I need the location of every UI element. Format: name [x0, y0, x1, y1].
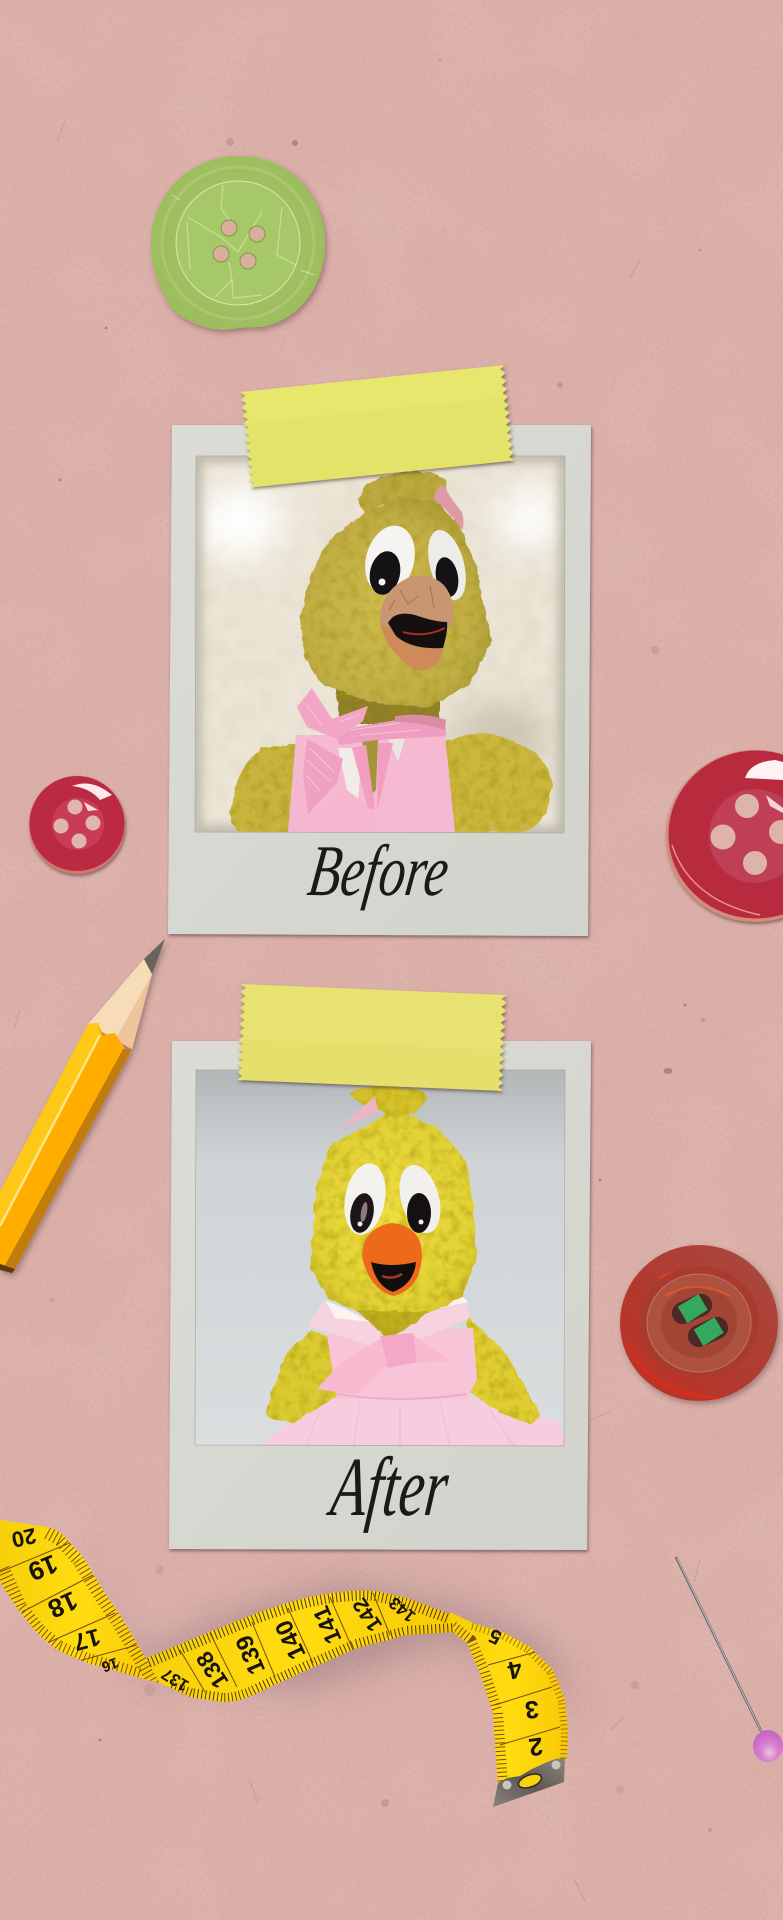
- chick eye right: [393, 1160, 447, 1238]
- tape numbers: 142: [348, 1594, 387, 1635]
- washi tape: top: [240, 365, 514, 488]
- tape numbers: 18: [44, 1585, 82, 1624]
- tape numbers: 137: [158, 1664, 192, 1695]
- chick hair bow: [338, 1096, 378, 1130]
- tape shadow: [75, 1550, 580, 1730]
- tape numbers: [486, 1624, 545, 1761]
- tape numbers: 19: [24, 1549, 62, 1587]
- button thread: [668, 1290, 716, 1328]
- chick tuft: [350, 1086, 427, 1118]
- tape tail section: [450, 1612, 568, 1807]
- chick skirt: [256, 1397, 566, 1448]
- pencil body: [0, 1023, 132, 1269]
- chick head: [310, 1114, 477, 1316]
- washi tape: top: [237, 984, 507, 1091]
- panel: after polaroid: [169, 984, 591, 1550]
- tape middle section: [140, 1590, 455, 1702]
- tape numbers: 3: [524, 1695, 540, 1724]
- chick neck: [355, 1310, 430, 1336]
- chick hair bow: [433, 485, 464, 530]
- tape numbers: 138: [191, 1647, 233, 1693]
- photo: after: [190, 1065, 570, 1450]
- icon: green button: [151, 156, 325, 330]
- tape numbers: 4: [505, 1654, 525, 1684]
- chick collar: [308, 1300, 470, 1350]
- tape numbers: [158, 1593, 419, 1695]
- chick neck ribbon: [333, 719, 446, 745]
- pencil wood: [88, 959, 152, 1049]
- chick arm right: [465, 1316, 541, 1425]
- panel: before polaroid: [168, 365, 591, 936]
- tape numbers: 140: [270, 1616, 312, 1663]
- caption: Before: Before: [304, 830, 454, 911]
- tape numbers: 139: [231, 1631, 271, 1678]
- icon: large red button: [666, 750, 783, 922]
- polaroid frame: [169, 1041, 591, 1550]
- tape numbers: [9, 1523, 120, 1675]
- chick arm right: [440, 734, 552, 832]
- caption: After: After: [324, 1440, 454, 1534]
- tape numbers: 2: [527, 1731, 545, 1761]
- chick eye left: [365, 526, 415, 594]
- chick arm left: [230, 744, 298, 834]
- icon: small red button: [29, 776, 125, 874]
- chick bow: [317, 1335, 452, 1395]
- icon: dark red button: [620, 1245, 778, 1401]
- tape metal tip: [493, 1758, 565, 1807]
- chick beak: [380, 576, 454, 670]
- tape numbers: 17: [70, 1623, 103, 1656]
- chick tuft: [358, 472, 446, 514]
- polaroid frame: [168, 425, 591, 936]
- tape numbers: 143: [385, 1593, 419, 1626]
- chick beak: [362, 1223, 422, 1296]
- chick neck: [335, 685, 440, 724]
- icon: sewing pin: [676, 1557, 783, 1762]
- chick chest: [288, 735, 455, 832]
- chick dress shading: [288, 790, 358, 832]
- tape numbers: 141: [308, 1602, 347, 1648]
- chick bodice: [327, 1328, 477, 1399]
- tape numbers: 20: [9, 1523, 39, 1553]
- tape numbers: 16: [99, 1653, 120, 1675]
- tape numbers: 5: [486, 1624, 505, 1648]
- icon: pencil: [0, 939, 165, 1273]
- pencil lead: [144, 939, 165, 974]
- chick ribbon strips: [352, 745, 375, 810]
- chick head: [300, 497, 492, 707]
- chick eye right: [428, 530, 466, 600]
- measuring tape: [0, 1520, 580, 1807]
- chick bow: [297, 688, 368, 739]
- photo: before: [190, 450, 570, 840]
- chick arm left: [266, 1330, 345, 1424]
- chick eye left: [339, 1160, 391, 1238]
- tape left section: [0, 1520, 160, 1683]
